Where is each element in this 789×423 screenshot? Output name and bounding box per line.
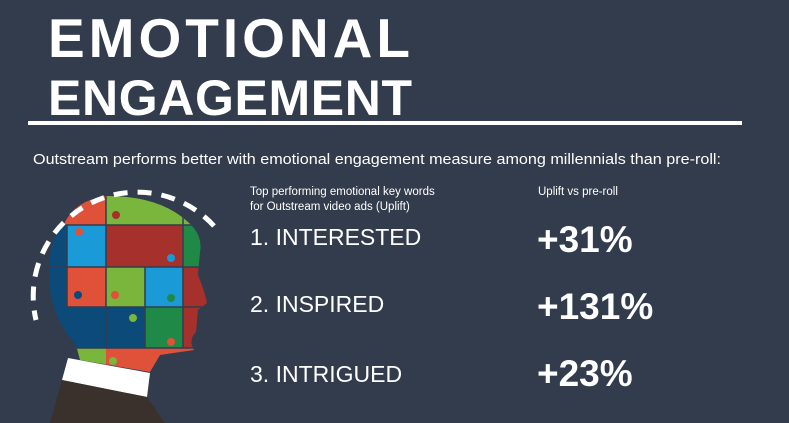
column header: keywords: Top performing emotional key words	[250, 186, 435, 198]
keyword list: 3. INTRIGUED	[250, 361, 402, 387]
keyword list: 1. INTERESTED	[250, 224, 421, 250]
icon: puzzle head	[49, 196, 207, 423]
title	[48, 7, 412, 126]
column header: keywords	[250, 186, 435, 213]
column header: keywords: for Outstream video ads (Uplift)	[250, 201, 410, 213]
title: ENGAGEMENT	[48, 70, 412, 126]
subtitle: Outstream performs better with emotional engagement measure among millennials than pre-roll:	[33, 151, 721, 168]
uplift values: +31%	[537, 219, 633, 260]
collar	[62, 358, 150, 397]
title: EMOTIONAL	[48, 7, 410, 69]
uplift values: +23%	[537, 353, 633, 394]
keyword list	[250, 224, 421, 387]
suit	[50, 380, 165, 423]
column header: uplift: Uplift vs pre-roll	[538, 186, 618, 198]
uplift values: +131%	[537, 286, 653, 327]
uplift values	[537, 219, 653, 394]
icon: dashed arc	[33, 192, 214, 320]
keyword list: 2. INSPIRED	[250, 291, 384, 317]
